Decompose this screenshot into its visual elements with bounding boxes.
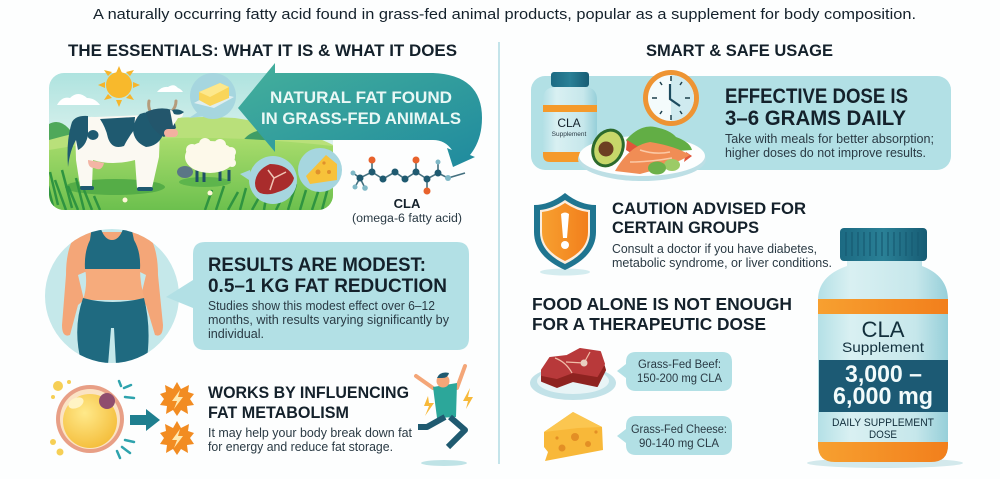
icon: clouds <box>57 85 183 105</box>
block: caution advised: metabolic syndrome, or liver conditions. <box>612 256 832 270</box>
callout: grass-fed cheese: Grass-Fed Cheese: <box>631 424 727 436</box>
block: works by influencing fat metabolism: WORKS BY INFLUENCING <box>208 384 409 402</box>
block: caution advised <box>612 200 832 270</box>
callout heading: 0.5–1 KG FAT REDUCTION <box>208 276 447 297</box>
dose body <box>725 132 934 160</box>
block: works by influencing fat metabolism: for energy and reduce fat storage. <box>208 440 393 454</box>
icon: caution shield <box>534 193 596 276</box>
icon: steak on plate <box>530 349 616 400</box>
caption: CLA molecule: (omega-6 fatty acid) <box>352 213 462 225</box>
callout body <box>208 299 450 341</box>
bottle caption: DOSE <box>869 429 897 441</box>
panel: effective dose <box>531 70 951 181</box>
orange band top <box>818 299 948 314</box>
icon: small supplement bottle <box>543 72 597 162</box>
icon: clock <box>643 70 699 126</box>
panel: grass-fed farm scene <box>48 66 342 210</box>
callout: grass-fed beef: 150-200 mg CLA <box>637 373 722 385</box>
callout heading: RESULTS ARE MODEST: <box>208 255 426 276</box>
dose heading <box>725 85 908 130</box>
block: caution advised: CERTAIN GROUPS <box>612 219 759 237</box>
callout: grass-fed cheese <box>617 416 732 455</box>
callout heading <box>208 255 447 297</box>
subtitle: A naturally occurring fatty acid found in grass-fed animal products, popular as a supplement for body composition. <box>93 6 916 23</box>
icon: energy burst bottom <box>160 421 194 455</box>
icon: sun <box>98 66 140 107</box>
caption: CLA molecule <box>352 196 462 225</box>
bottle body <box>818 260 948 462</box>
callout body: Studies show this modest effect over 6–12 <box>208 299 435 313</box>
callout body: individual. <box>208 327 264 341</box>
icon: meat bubble <box>240 156 297 204</box>
dose heading: 3–6 GRAMS DAILY <box>725 107 906 130</box>
icon: cheese bubble <box>298 148 342 192</box>
arrow: fat to energy <box>130 409 160 431</box>
bottle dose band <box>819 360 948 412</box>
icon: small supplement bottle: CLA <box>557 116 581 130</box>
icon: cow <box>68 101 184 191</box>
callout: results are modest <box>166 242 469 350</box>
bottle cap <box>840 228 927 261</box>
block: caution advised: CAUTION ADVISED FOR <box>612 200 806 218</box>
molecule: CLA <box>350 156 465 194</box>
icon: small supplement bottle: Supplement <box>552 131 587 138</box>
icon: plate of food <box>578 123 706 181</box>
callout: grass-fed cheese: 90-140 mg CLA <box>639 438 719 450</box>
icon: cheese wedge <box>544 412 603 461</box>
icon: large supplement bottle <box>807 228 963 468</box>
callout body: months, with results varying significantly by <box>208 313 450 327</box>
pasture landscape <box>48 73 333 210</box>
callout: grass-fed beef <box>617 352 732 391</box>
dose body: Take with meals for better absorption; <box>725 132 934 146</box>
banner text: NATURAL FAT FOUND <box>270 88 452 107</box>
dose heading: EFFECTIVE DOSE IS <box>725 85 908 108</box>
block: works by influencing fat metabolism: It may help your body break down fat <box>208 426 413 440</box>
icon: butter bubble <box>189 73 236 119</box>
column divider <box>498 42 500 464</box>
icon: sheep <box>177 138 236 182</box>
heading: food alone: FOOD ALONE IS NOT ENOUGH <box>532 294 792 314</box>
icon: jumping person <box>416 366 473 466</box>
bottle dose band: 3,000 – <box>845 361 922 388</box>
bottle label name: CLA <box>862 317 905 342</box>
banner text: IN GRASS-FED ANIMALS <box>261 109 461 128</box>
banner text <box>261 88 461 128</box>
heading: the essentials: THE ESSENTIALS: WHAT IT IS & WHAT IT DOES <box>68 42 457 60</box>
heading: food alone <box>532 294 792 334</box>
heading: smart and safe usage: SMART & SAFE USAGE <box>646 42 833 60</box>
bottle label name: Supplement <box>842 339 924 355</box>
block: caution advised: Consult a doctor if you have diabetes, <box>612 242 817 256</box>
block: works by influencing fat metabolism: FAT METABOLISM <box>208 404 349 422</box>
bottle dose band: 6,000 mg <box>833 383 933 410</box>
icon: body figure <box>45 226 179 365</box>
icon: energy burst top <box>160 382 194 416</box>
dose body: higher doses do not improve results. <box>725 146 926 160</box>
orange band bottom <box>818 442 948 462</box>
bottle caption: DAILY SUPPLEMENT <box>832 417 934 429</box>
bottle label name <box>842 317 924 355</box>
icon: fat cell <box>50 380 134 458</box>
caption: CLA molecule: CLA <box>394 196 421 211</box>
heading: food alone: FOR A THERAPEUTIC DOSE <box>532 314 766 334</box>
arrow banner: natural fat <box>238 63 482 167</box>
block: works by influencing fat metabolism <box>208 384 413 454</box>
callout: grass-fed beef: Grass-Fed Beef: <box>638 359 721 371</box>
bottle caption <box>832 417 934 441</box>
